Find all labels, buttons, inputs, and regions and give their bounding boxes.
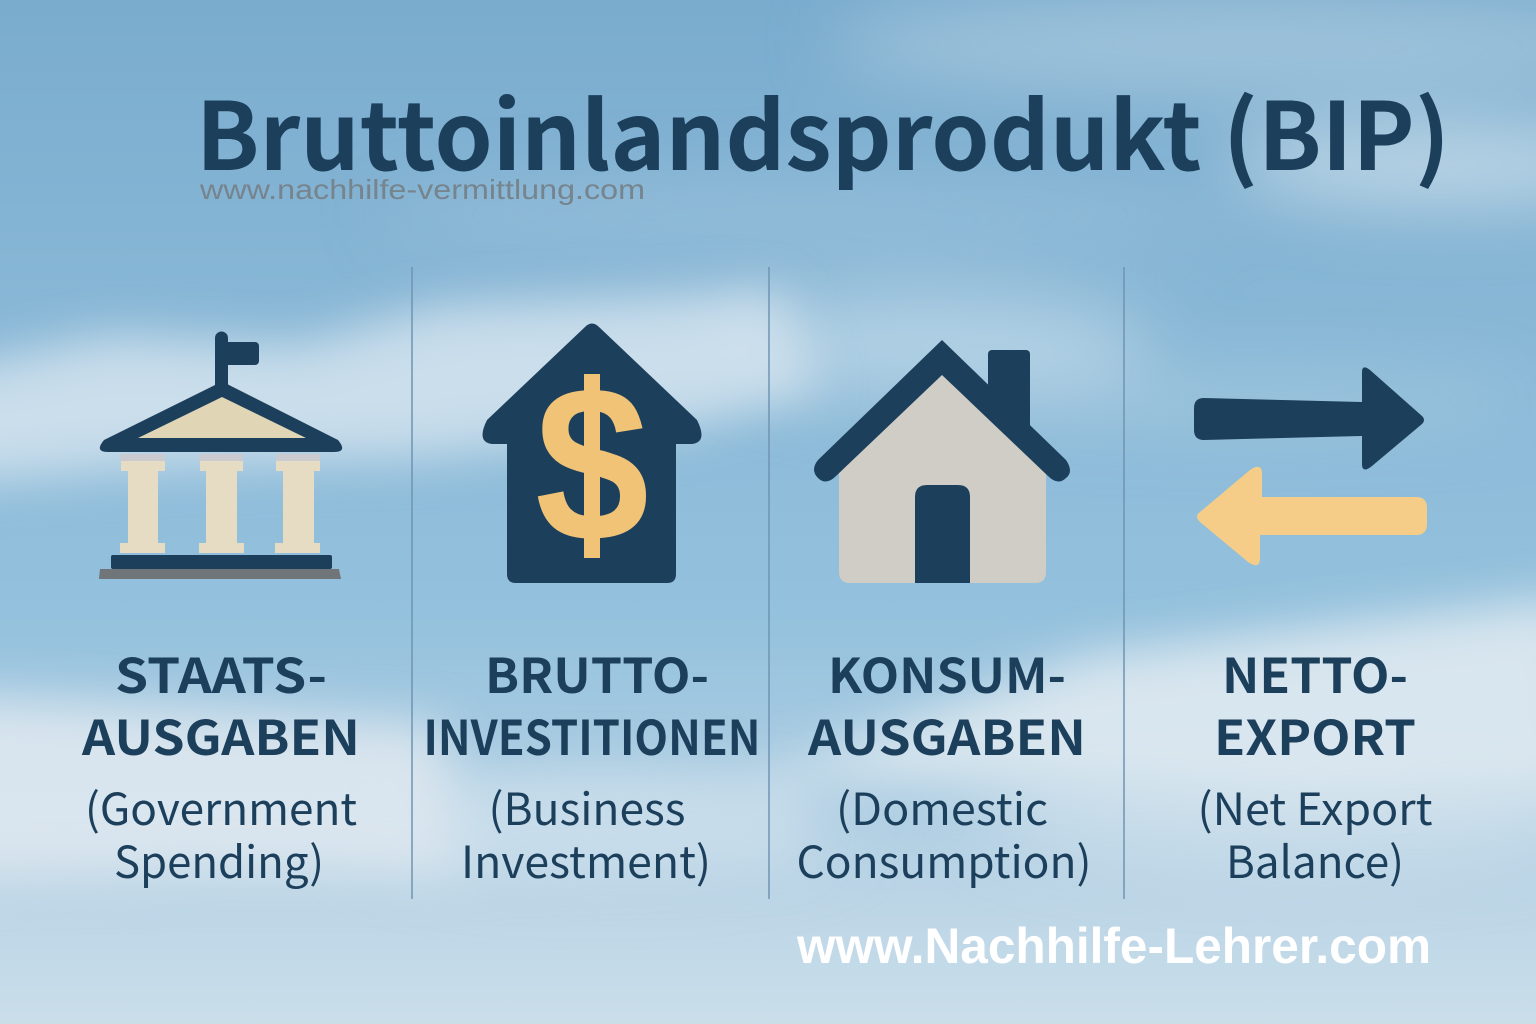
- column dividers: [412, 267, 1124, 899]
- arrow right: [1194, 367, 1424, 470]
- column 3 label: KONSUM-: [828, 637, 1066, 707]
- column 1 label: AUSGABEN: [81, 699, 360, 769]
- column 1 label: Spending): [114, 827, 324, 891]
- icon: house with dollar sign: [483, 324, 701, 589]
- icon: government building: [99, 332, 342, 579]
- column 4 label: (Net Export: [1198, 774, 1432, 838]
- column 2 label: (Business: [488, 774, 686, 838]
- column 3 label: AUSGABEN: [807, 699, 1086, 769]
- column 4 label: Balance): [1226, 827, 1404, 891]
- icon: export and import arrows: [1194, 367, 1427, 565]
- column 1 label: [81, 637, 360, 891]
- column 2 label: INVESTITIONEN: [424, 699, 760, 769]
- watermark bottom: www.Nachhilfe-Lehrer.com: [796, 918, 1431, 974]
- title: Bruttoinlandsprodukt (BIP): [196, 62, 1450, 198]
- column 2 label: BRUTTO-: [485, 637, 709, 707]
- arrow left: [1197, 467, 1427, 565]
- icon: house with dollar sign: $: [535, 341, 649, 589]
- watermark top: www.nachhilfe-vermittlung.com: [199, 174, 645, 205]
- column 3 label: Consumption): [796, 827, 1092, 891]
- column 1 label: (Government: [85, 774, 357, 838]
- column 4 label: EXPORT: [1214, 699, 1416, 769]
- column 3 label: [796, 637, 1092, 891]
- column 1 label: STAATS-: [115, 637, 327, 707]
- column 4 label: [1198, 637, 1432, 891]
- column 4 label: NETTO-: [1222, 637, 1408, 707]
- icon: house: [814, 340, 1070, 583]
- column 2 label: [424, 637, 760, 891]
- column 2 label: Investment): [461, 827, 711, 891]
- column 3 label: (Domestic: [836, 774, 1048, 838]
